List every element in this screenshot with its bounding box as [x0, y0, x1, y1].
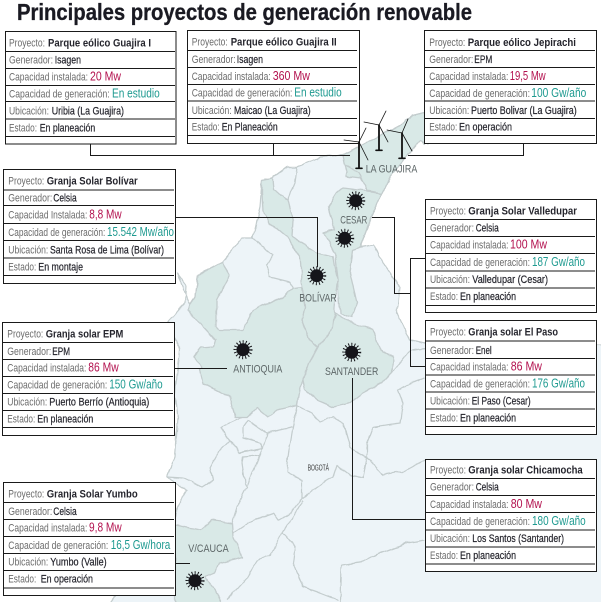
- row: installed capacity: 360 Mw: [273, 69, 311, 83]
- row: project: [192, 37, 337, 49]
- panel: Granja solar El Paso: [426, 320, 596, 434]
- row: installed capacity: Capacidad instalada:: [192, 71, 271, 83]
- row: location: [7, 396, 149, 408]
- row: project: Granja solar Chicamocha: [468, 465, 583, 477]
- row: generator: Generador:: [8, 193, 52, 205]
- row: project: Parque eólico Guajira I: [48, 38, 151, 50]
- row: project: Granja Solar Valledupar: [468, 206, 578, 218]
- panel: Parque eólico Jepirachi: [424, 30, 596, 144]
- icon: solar marker Cesar north: [348, 193, 363, 208]
- row: location: [8, 557, 107, 569]
- icon: solar marker Bolívar: [309, 268, 324, 283]
- row: project: Granja Solar Bolívar: [47, 175, 138, 187]
- row: location: Ubicación:: [192, 105, 232, 117]
- row: location: Los Santos (Santander): [472, 533, 564, 545]
- row: status: En operación: [41, 574, 93, 586]
- row: generator: Celsia: [53, 506, 77, 518]
- row: project: [8, 489, 138, 501]
- row: generation capacity: 16,5 Gw/hora: [111, 538, 170, 552]
- row: installed capacity: 86 Mw: [511, 360, 543, 374]
- row: generation capacity: Capacidad de generación:: [430, 379, 530, 391]
- row: status: En planeación: [460, 413, 516, 425]
- row: generation capacity: 150 Gw/año: [109, 378, 163, 392]
- row: location: [430, 533, 564, 545]
- row: status: [430, 550, 516, 562]
- icon: solar marker Cesar south: [337, 231, 352, 246]
- row: status: En planeación: [460, 291, 516, 303]
- row: status: Estado:: [430, 291, 458, 303]
- row: status: [9, 123, 95, 135]
- row: status: [192, 122, 278, 134]
- row: status: En planeación: [37, 414, 93, 426]
- row: installed capacity: 20 Mw: [90, 70, 122, 84]
- row: location: Ubicación:: [430, 274, 470, 286]
- row: location: Ubicación:: [430, 533, 470, 545]
- row: status: Estado:: [7, 414, 35, 426]
- row: generator: Celsia: [476, 223, 499, 235]
- panel: Granja Solar Valledupar: [426, 200, 596, 312]
- row: generation capacity: 100 Gw/año: [531, 86, 586, 100]
- row: location: Ubicación:: [9, 106, 49, 118]
- row: location: Santa Rosa de Lima (Bolívar): [50, 244, 164, 256]
- row: status: [8, 261, 83, 273]
- row: generator: Generador:: [7, 346, 51, 358]
- panel: Granja Solar Bolívar: [4, 170, 176, 284]
- row: generation capacity: Capacidad de generación:: [8, 540, 108, 552]
- connector lines: [90, 143, 524, 564]
- row: generation capacity: [8, 225, 174, 239]
- row: generation capacity: Capacidad de generación:: [192, 88, 292, 100]
- label: Santander: SANTANDER: [325, 366, 378, 378]
- row: project: Parque eólico Jepirachi: [468, 37, 576, 49]
- row: project: [430, 327, 558, 339]
- row: status: En operación: [459, 122, 512, 134]
- row: status: Estado:: [429, 122, 457, 134]
- row: status: En planeación: [460, 550, 516, 562]
- row: project: Proyecto:: [8, 489, 44, 501]
- row: project: Granja Solar Yumbo: [47, 489, 138, 501]
- row: status: En montaje: [38, 261, 83, 273]
- row: status: [8, 574, 93, 586]
- row: installed capacity: Capacidad instalada:: [7, 363, 86, 375]
- row: generator: EPM: [474, 54, 492, 66]
- row: generator: Isagen: [55, 54, 81, 66]
- row: location: Ubicación:: [8, 557, 48, 569]
- row: installed capacity: 86 Mw: [88, 361, 119, 375]
- row: installed capacity: 8,8 Mw: [89, 208, 122, 222]
- label: Cesar: CESAR: [340, 215, 367, 227]
- row: project: [8, 175, 138, 187]
- row: status: En Planeación: [222, 122, 278, 134]
- row: generation capacity: Capacidad de generación:: [9, 89, 110, 101]
- land base: [105, 112, 601, 602]
- row: project: Proyecto:: [430, 465, 466, 477]
- row: project: [9, 38, 151, 50]
- row: location: [9, 106, 124, 118]
- row: status: [430, 291, 516, 303]
- row: project: [429, 37, 576, 49]
- row: generation capacity: [8, 538, 170, 552]
- label: Bogotá: BOGOTÁ: [308, 464, 329, 473]
- row: generator: Generador:: [430, 345, 474, 357]
- row: generation capacity: Capacidad de generación:: [430, 257, 530, 269]
- department: Bolívar: [262, 178, 338, 347]
- row: project: Granja solar El Paso: [468, 327, 558, 339]
- row: generation capacity: Capacidad de generación:: [7, 380, 107, 392]
- row: generator: Generador:: [429, 54, 473, 66]
- row: project: Proyecto:: [430, 327, 466, 339]
- icon: solar marker Valle del Cauca: [188, 573, 202, 588]
- label: Bolívar: BOLÍVAR: [299, 292, 337, 305]
- row: location: [430, 396, 531, 408]
- icon: solar marker Santander: [344, 345, 359, 360]
- panel: Parque eólico Guajira II: [188, 30, 360, 144]
- row: generator: Generador:: [430, 482, 474, 494]
- row: project: Proyecto:: [7, 329, 43, 341]
- row: location: [8, 244, 164, 256]
- row: project: Parque eólico Guajira II: [231, 37, 337, 49]
- row: generator: Enel: [476, 345, 492, 357]
- label: Antioquia: ANTIOQUIA: [233, 364, 283, 376]
- icon: wind turbine 2: [364, 111, 388, 150]
- row: project: Proyecto:: [429, 37, 465, 49]
- row: installed capacity: Capacidad instalada:: [430, 362, 508, 374]
- row: status: En planeación: [40, 123, 95, 135]
- row: generator: Generador:: [9, 54, 53, 66]
- department: Valle del Cauca: [175, 520, 242, 602]
- row: status: [430, 413, 516, 425]
- row: generation capacity: En estudio: [112, 87, 160, 101]
- row: project: Proyecto:: [8, 175, 44, 187]
- row: location: [429, 105, 577, 117]
- row: installed capacity: Capacidad instalada:: [8, 523, 87, 535]
- row: project: Proyecto:: [192, 37, 228, 49]
- row: location: Puerto Berrío (Antioquia): [49, 396, 149, 408]
- row: generation capacity: 176 Gw/año: [532, 377, 585, 391]
- panel: Granja solar Chicamocha: [426, 460, 596, 572]
- department: Cesar: [323, 188, 382, 317]
- map of Colombia: [105, 112, 601, 602]
- row: generator: Isagen: [237, 54, 263, 66]
- row: status: [7, 414, 93, 426]
- row: installed capacity: Capacidad instalada:: [430, 240, 508, 252]
- panel: Granja Solar Yumbo: [4, 482, 176, 596]
- row: installed capacity: Capacidad Instalada:: [8, 210, 87, 222]
- row: generation capacity: Capacidad de generación:: [8, 227, 105, 239]
- row: location: Maicao (La Guajira): [234, 105, 311, 117]
- row: installed capacity: Capacidad instalada:: [429, 71, 508, 83]
- row: location: Uribia (La Guajira): [52, 106, 124, 118]
- row: location: Yumbo (Valle): [50, 557, 107, 569]
- row: generation capacity: 15.542 Mw/año: [107, 225, 174, 239]
- row: location: Puerto Bolivar (La Guajira): [471, 105, 577, 117]
- row: generator: Celsia: [476, 482, 499, 494]
- row: generation capacity: 180 Gw/año: [532, 514, 586, 528]
- icon: solar marker Antioquia: [236, 342, 250, 357]
- row: status: Estado:: [192, 122, 220, 134]
- row: project: [7, 329, 123, 341]
- row: generation capacity: Capacidad de generación:: [430, 516, 530, 528]
- row: generator: EPM: [52, 346, 70, 358]
- row: status: Estado:: [9, 123, 37, 135]
- row: installed capacity: 19,5 Mw: [510, 69, 546, 83]
- row: installed capacity: 9,8 Mw: [89, 521, 122, 535]
- row: status: Estado:: [430, 550, 458, 562]
- row: installed capacity: 80 Mw: [511, 497, 543, 511]
- icon: wind turbine 1: [344, 128, 368, 168]
- row: location: Ubicación:: [429, 105, 469, 117]
- panel: Parque eólico Guajira I: [6, 32, 176, 144]
- row: generation capacity: 187 Gw/año: [532, 255, 585, 269]
- row: status: [429, 122, 512, 134]
- row: generator: Generador:: [192, 54, 236, 66]
- row: generator: Generador:: [8, 506, 52, 518]
- department boundaries: [167, 165, 425, 602]
- row: generator: Generador:: [430, 223, 474, 235]
- label: La Guajira: LA GUAJIRA: [366, 164, 418, 176]
- row: location: El Paso (Cesar): [472, 396, 531, 408]
- panel: Granja solar EPM: [2, 322, 174, 436]
- row: project: Proyecto:: [430, 206, 466, 218]
- row: project: [430, 206, 578, 218]
- department: La Guajira: [343, 112, 428, 193]
- label: Valle del Cauca: V/CAUCA: [188, 543, 229, 555]
- row: location: Ubicación:: [430, 396, 470, 408]
- row: generator: Celsia: [53, 193, 77, 205]
- department: Antioquia: [188, 262, 318, 417]
- row: generation capacity: Capacidad de generación:: [429, 88, 530, 100]
- row: project: [430, 465, 583, 477]
- row: installed capacity: 100 Mw: [510, 238, 548, 252]
- row: installed capacity: Capacidad instalada:: [9, 72, 88, 84]
- row: project: Granja solar EPM: [46, 329, 123, 341]
- row: status: Estado:: [430, 413, 458, 425]
- icon: wind turbine 3: [387, 119, 412, 158]
- row: generation capacity: En estudio: [294, 86, 342, 100]
- row: location: Valledupar (Cesar): [472, 274, 548, 286]
- row: status: Estado:: [8, 574, 36, 586]
- department: Santander: [303, 313, 393, 407]
- row: project: Proyecto:: [9, 38, 45, 50]
- row: status: Estado:: [8, 261, 36, 273]
- row: location: [430, 274, 548, 286]
- row: location: Ubicación:: [7, 396, 47, 408]
- row: installed capacity: Capacidad instalada:: [430, 499, 508, 511]
- row: location: [192, 105, 311, 117]
- row: location: Ubicación:: [8, 244, 48, 256]
